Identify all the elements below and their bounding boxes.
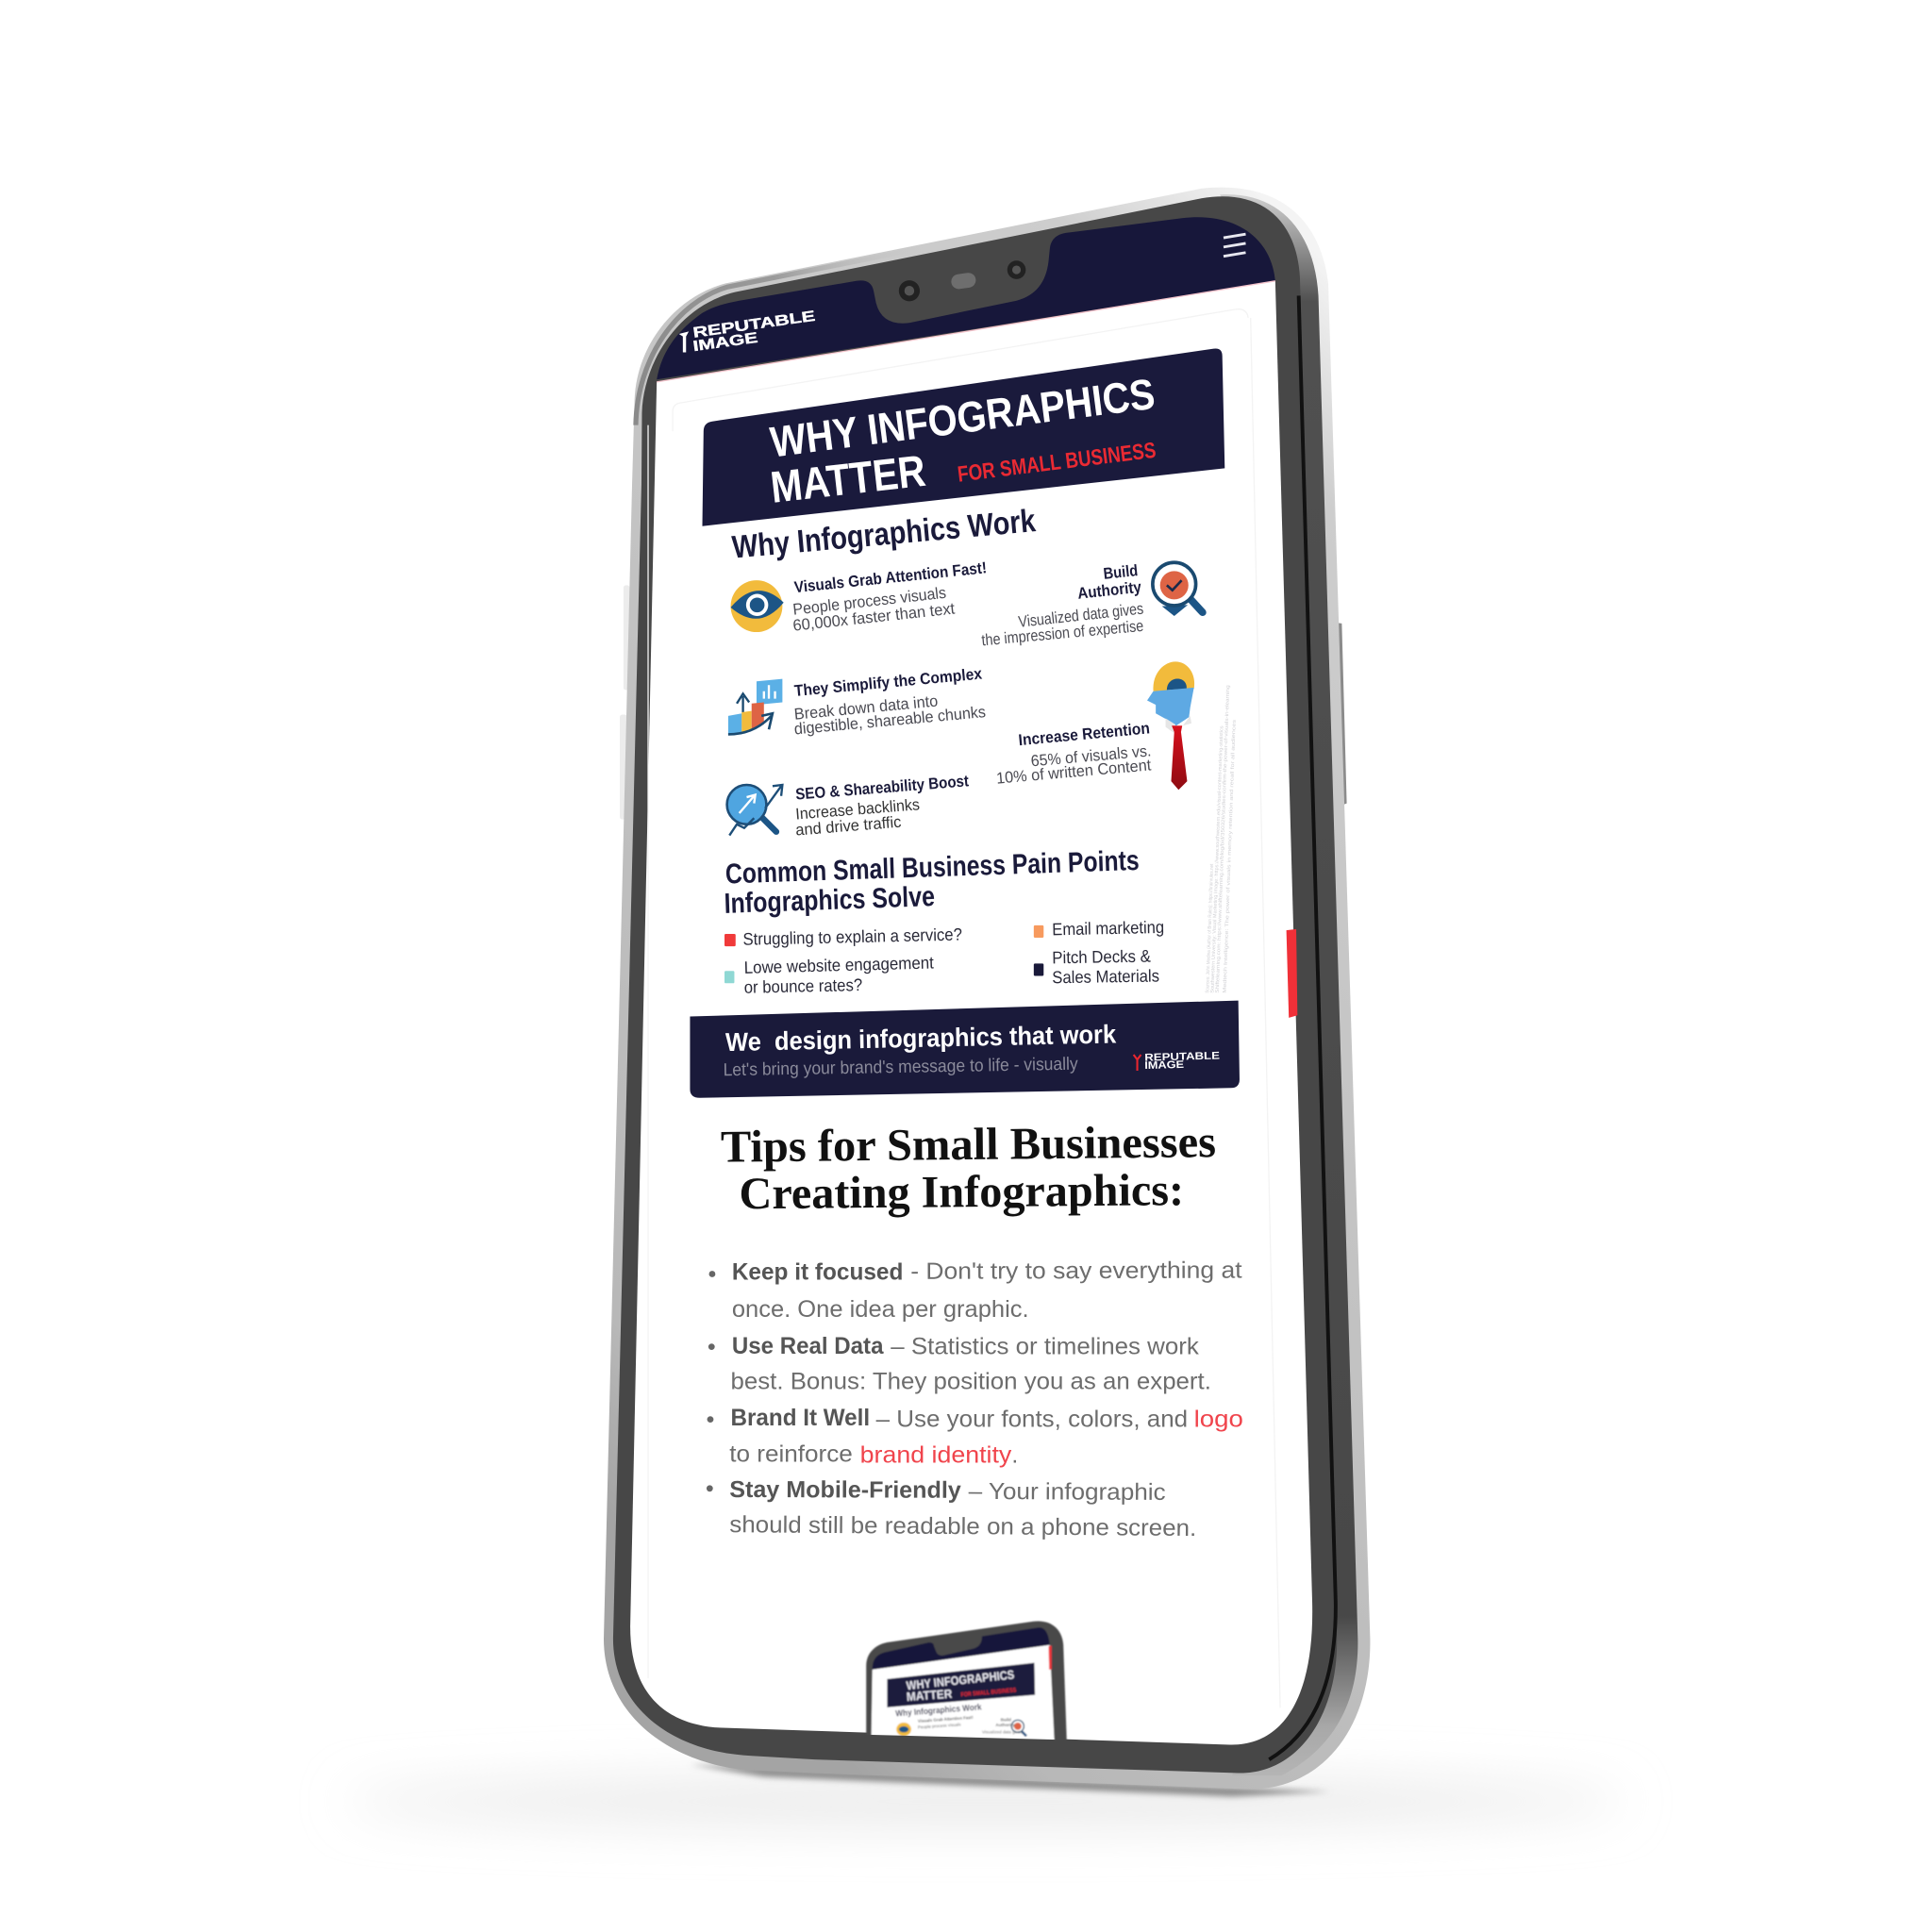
thumbnail header bbox=[873, 1627, 1050, 1670]
notch cameras bbox=[899, 260, 1025, 301]
tip: keep it focused bbox=[732, 1258, 1242, 1323]
brand logo bbox=[679, 308, 816, 355]
item: build authority: Build bbox=[1103, 561, 1139, 583]
tip: stay mobile-friendly bbox=[729, 1477, 1196, 1541]
item: simplify the complex: They Simplify the Complex bbox=[793, 665, 983, 700]
source notes: Medtech Intelligence: The power of visuals in memory retention and recall for all audiences bbox=[1223, 719, 1238, 993]
subtitle: FOR SMALL BUSINESS bbox=[957, 438, 1158, 487]
tip: keep it focused: once. One idea per graphic. bbox=[732, 1297, 1029, 1323]
tip: brand it well: Brand It Well bbox=[731, 1406, 870, 1431]
tip: use real data: – Statistics or timelines work bbox=[891, 1334, 1199, 1359]
screen bbox=[630, 281, 1312, 1744]
tips heading: Creating Infographics: bbox=[739, 1165, 1184, 1219]
icon: authority magnifier badge bbox=[1153, 562, 1203, 616]
item: build authority: Authority bbox=[1076, 578, 1142, 603]
cta logo: REPUTABLE bbox=[1144, 1050, 1220, 1064]
icon: complexity chart bbox=[728, 679, 782, 734]
item: increase retention: Increase Retention bbox=[1018, 719, 1151, 749]
list bullets bbox=[707, 1271, 715, 1491]
tip: brand it well: . bbox=[1011, 1442, 1018, 1468]
thumbnail small text bbox=[918, 1715, 1023, 1735]
section heading: Infographics Solve bbox=[724, 881, 935, 920]
outer dark band bbox=[1220, 194, 1357, 1775]
thumbnail small text: Visualized data gives bbox=[982, 1730, 1023, 1735]
tip: keep it focused: Keep it focused bbox=[732, 1259, 903, 1285]
tips list bbox=[707, 1258, 1243, 1541]
frame upper-left shading bbox=[636, 245, 937, 425]
tip: brand it well: brand identity bbox=[860, 1442, 1012, 1468]
section heading bbox=[724, 845, 1140, 920]
pain point labels: Email marketing bbox=[1052, 917, 1164, 939]
item: visuals grab attention: Visuals Grab Attention Fast! bbox=[793, 558, 988, 596]
title banner bbox=[702, 348, 1224, 526]
thumbnail title text bbox=[895, 1667, 1017, 1718]
item: seo and shareability: Increase backlinks bbox=[795, 795, 921, 824]
source notes bbox=[1205, 685, 1238, 993]
tip: stay mobile-friendly: Stay Mobile-Friendly bbox=[729, 1477, 961, 1504]
thumbnail frame bbox=[866, 1621, 1067, 1750]
title: WHY INFOGRAPHICS bbox=[768, 370, 1158, 466]
thumbnail small text: Authority bbox=[995, 1723, 1015, 1727]
icon: seo magnifier bbox=[727, 785, 782, 836]
item: build authority bbox=[981, 561, 1144, 649]
thumbnail title text: MATTER bbox=[906, 1687, 953, 1704]
phone body bbox=[604, 188, 1370, 1789]
thumbnail small text: People process visuals bbox=[918, 1722, 961, 1729]
cta logo bbox=[1134, 1050, 1220, 1072]
phone mockup infographic bbox=[445, 187, 1526, 1831]
side buttons bbox=[620, 585, 1347, 820]
item: seo and shareability: and drive traffic bbox=[795, 813, 903, 840]
thumbnail title text: WHY INFOGRAPHICS bbox=[906, 1667, 1015, 1692]
thumbnail small text: Visuals Grab Attention Fast! bbox=[918, 1715, 974, 1724]
thumbnail scrollbar bbox=[1049, 1645, 1052, 1670]
cta headline: We design infographics that work bbox=[725, 1019, 1117, 1057]
header pink edge bbox=[657, 281, 1275, 382]
brand logo: REPUTABLE bbox=[692, 308, 816, 341]
item: increase retention bbox=[995, 719, 1152, 788]
source notes: Shiftelearning.com: https://www.shiftelearning.com/blog/bid/350326/studies-confirm-the-power-of-visuals-in-elearning bbox=[1215, 685, 1231, 993]
item: seo and shareability: SEO & Shareability Boost bbox=[795, 772, 970, 804]
title second line: MATTER bbox=[768, 445, 928, 512]
source notes: Southwestern University: Visual Marketing Image: https://www.southwestern.edu/visual-content-marketing-statistics bbox=[1210, 725, 1224, 993]
item: build authority: the impression of expertise bbox=[981, 617, 1144, 649]
section: pain points bbox=[724, 845, 1164, 997]
tip: use real data: best. Bonus: They position you as an expert. bbox=[731, 1370, 1211, 1395]
item: increase retention: 10% of written Content bbox=[995, 756, 1152, 788]
tips heading: Tips for Small Businesses bbox=[721, 1117, 1216, 1173]
hamburger menu bbox=[1224, 234, 1245, 257]
ground shadow bbox=[345, 1764, 1626, 1824]
thumbnail title banner bbox=[887, 1663, 1035, 1707]
tip: stay mobile-friendly: should still be readable on a phone screen. bbox=[729, 1512, 1196, 1541]
section heading: Why Infographics Work bbox=[730, 503, 1037, 566]
faint page gutters bbox=[648, 309, 1280, 1707]
pain point labels bbox=[742, 917, 1164, 997]
tip: brand it well: – Use your fonts, colors, and bbox=[876, 1407, 1188, 1432]
tip: stay mobile-friendly: – Your infographic bbox=[969, 1479, 1166, 1506]
pain point bullets bbox=[724, 925, 1043, 983]
section heading: Common Small Business Pain Points bbox=[724, 845, 1140, 890]
bezel black stripe bbox=[1269, 295, 1336, 1759]
section: why infographics work bbox=[727, 503, 1203, 840]
thumbnail title text: Why Infographics Work bbox=[895, 1702, 983, 1718]
item: increase retention: 65% of visuals vs. bbox=[1030, 741, 1152, 770]
pain point labels: Pitch Decks & bbox=[1052, 946, 1151, 967]
call to action banner bbox=[690, 1001, 1240, 1098]
brand logo: IMAGE bbox=[692, 330, 758, 355]
icon: head with tie bbox=[1147, 661, 1194, 790]
pain point labels: Sales Materials bbox=[1052, 966, 1159, 987]
item: visuals grab attention bbox=[791, 558, 988, 635]
tip: keep it focused: - Don't try to say everything at bbox=[910, 1258, 1242, 1285]
tip: brand it well: logo bbox=[1194, 1407, 1243, 1432]
tip: brand it well: to reinforce bbox=[729, 1442, 853, 1468]
scrollbar bbox=[1287, 929, 1297, 1018]
item: visuals grab attention: People process visuals bbox=[791, 584, 947, 619]
item: simplify the complex: digestible, shareable chunks bbox=[793, 703, 987, 738]
item: build authority: Visualized data gives bbox=[1018, 600, 1144, 631]
item: visuals grab attention: 60,000x faster than text bbox=[792, 599, 956, 635]
tip: brand it well bbox=[729, 1406, 1243, 1468]
item: simplify the complex bbox=[793, 665, 987, 738]
cta subline: Let's bring your brand's message to life - visually bbox=[723, 1055, 1078, 1080]
thumbnail small text: Build bbox=[1001, 1718, 1011, 1723]
item: simplify the complex: Break down data into bbox=[793, 691, 939, 724]
cta logo: IMAGE bbox=[1144, 1059, 1184, 1072]
thumbnail icons bbox=[896, 1720, 1026, 1736]
pain point labels: or bounce rates? bbox=[744, 974, 862, 997]
icon: eye bbox=[731, 580, 784, 632]
thumbnail screen bbox=[871, 1645, 1055, 1750]
source notes: Sources: John Medina (Author of Brain Rules): https://brainrules.net bbox=[1205, 863, 1215, 993]
thumbnail title text: FOR SMALL BUSINESS bbox=[960, 1687, 1017, 1699]
pain point labels: Struggling to explain a service? bbox=[742, 924, 962, 949]
tip: use real data: Use Real Data bbox=[732, 1334, 884, 1359]
header bar bbox=[657, 217, 1275, 379]
dark bezel bbox=[613, 196, 1337, 1774]
tips heading bbox=[721, 1117, 1216, 1219]
silver frame bbox=[604, 188, 1370, 1789]
item: seo and shareability bbox=[795, 772, 970, 840]
nested phone thumbnail bbox=[866, 1621, 1067, 1750]
pain point labels: Lowe website engagement bbox=[743, 953, 934, 977]
tip: use real data bbox=[731, 1334, 1211, 1395]
